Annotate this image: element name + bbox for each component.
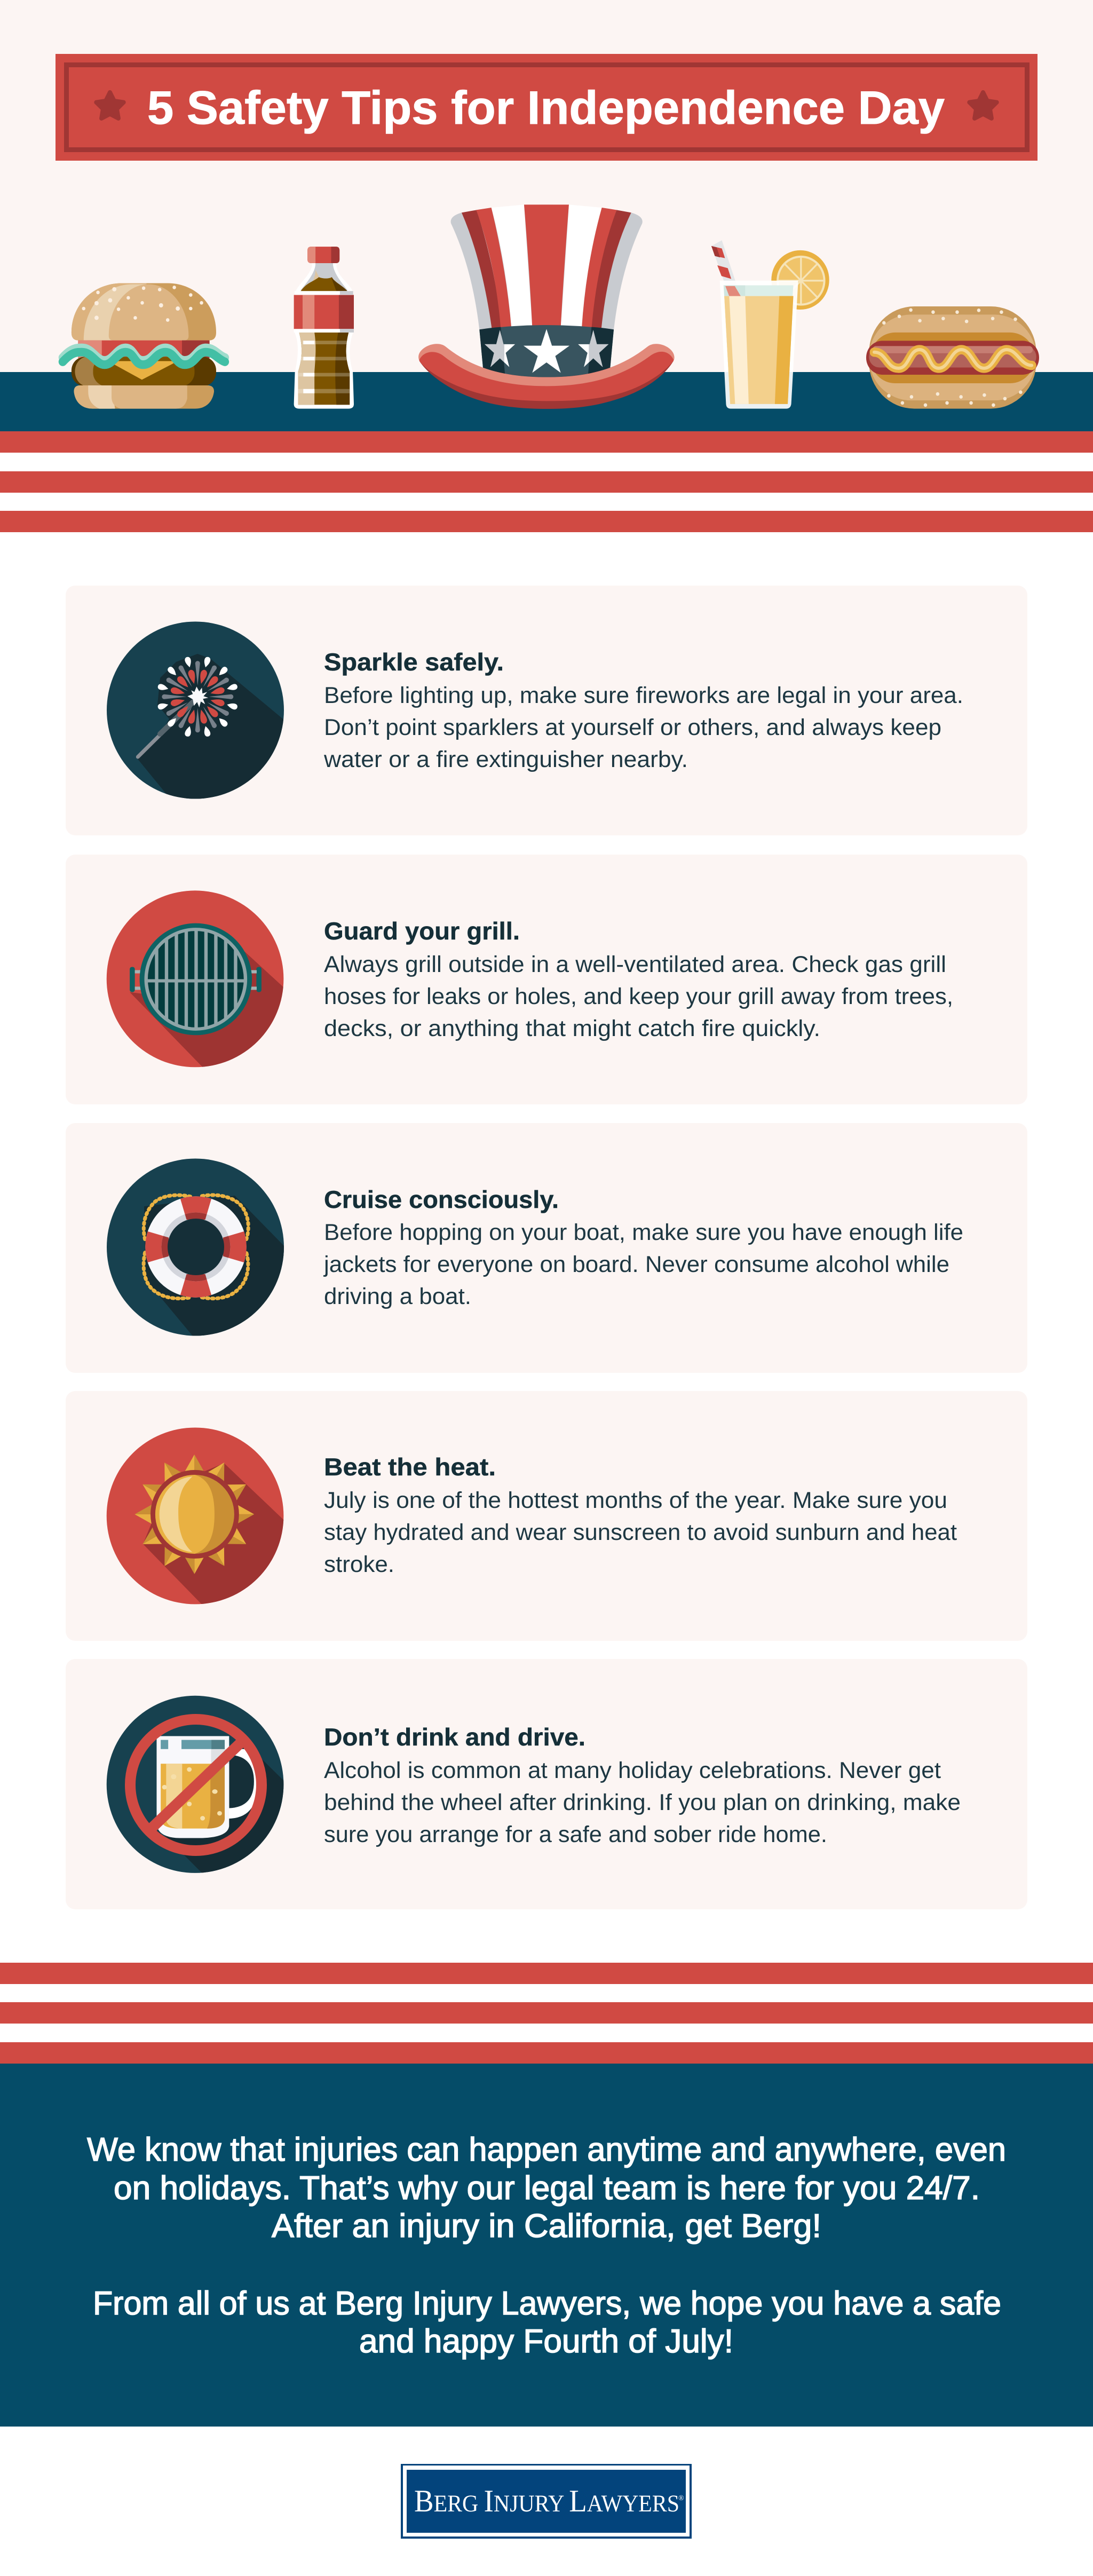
title banner (56, 54, 1037, 161)
body text: decks, or anything that might catch fire quickly. (324, 1016, 820, 1041)
body text: water or a fire extinguisher nearby. (323, 747, 688, 772)
icon: left star (96, 92, 124, 118)
star: left (485, 330, 515, 367)
body text: Before lighting up, make sure fireworks are legal in your area. (324, 683, 963, 708)
lemon slice (771, 250, 829, 310)
panel: Don't drink and drive (66, 1659, 1027, 1909)
illustration: burger (63, 283, 225, 409)
closing message: We know that injuries can happen anytime and anywhere, even (87, 2131, 1006, 2168)
illustration: Uncle Sam hat (418, 204, 675, 409)
body text: sure you arrange for a safe and sober ride home. (324, 1822, 827, 1847)
closing message: After an injury in California, get Berg! (272, 2208, 821, 2245)
title: 5 Safety Tips for Independence Day (147, 81, 945, 134)
body text (324, 952, 953, 1041)
body text (324, 1488, 957, 1577)
top background (0, 0, 1093, 372)
body text (323, 1220, 963, 1309)
top stripes (0, 431, 1093, 532)
body text: driving a boat. (324, 1284, 471, 1309)
closing message: From all of us at Berg Injury Lawyers, we hope you have a safe (93, 2285, 1001, 2322)
closing message (87, 2131, 1006, 2360)
heading: Beat the heat. (324, 1453, 496, 1481)
closing message: and happy Fourth of July! (359, 2323, 733, 2360)
body text: stay hydrated and wear sunscreen to avoid sunburn and heat (324, 1520, 957, 1545)
body text: Before hopping on your boat, make sure you have enough life (324, 1220, 963, 1245)
body text: Always grill outside in a well-ventilated area. Check gas grill (324, 952, 946, 977)
panel: Cruise consciously (66, 1123, 1027, 1373)
icon: sun (107, 1427, 289, 1610)
icon: no beer (107, 1696, 289, 1876)
icon: sparkler (107, 621, 288, 806)
icon: life ring (107, 1158, 288, 1345)
heading: Guard your grill. (324, 917, 520, 945)
illustration: cola bottle (294, 247, 354, 409)
illustration: lemonade glass (711, 240, 829, 409)
navy table band (0, 372, 1093, 431)
panel: Sparkle safely (66, 586, 1027, 835)
icon: grill (107, 890, 302, 1068)
body text: hoses for leaks or holes, and keep your grill away from trees, (324, 984, 953, 1009)
panel: Beat the heat (66, 1391, 1027, 1641)
icon: right star (969, 92, 997, 118)
body text (323, 683, 963, 772)
heading: Sparkle safely. (324, 648, 504, 676)
body text: July is one of the hottest months of the year. Make sure you (324, 1488, 947, 1513)
body text: behind the wheel after drinking. If you plan on drinking, make (324, 1790, 961, 1815)
body text: Don’t point sparklers at yourself or others, and always keep (324, 715, 941, 740)
heading: Cruise consciously. (324, 1186, 559, 1213)
star: right (578, 330, 608, 367)
footer panel (0, 2064, 1093, 2427)
body text: stroke. (324, 1552, 394, 1577)
heading: Don’t drink and drive. (324, 1723, 585, 1751)
logo: Berg Injury Lawyers (401, 2464, 692, 2539)
body text: Alcohol is common at many holiday celebrations. Never get (324, 1758, 941, 1783)
bottom stripes (0, 1963, 1093, 2064)
star: centre (524, 329, 569, 373)
illustration: hot dog (866, 306, 1039, 409)
closing message: on holidays. That’s why our legal team is here for you 24/7. (114, 2170, 980, 2207)
logo: Berg Injury Lawyers: ® (678, 2494, 684, 2502)
straw (711, 240, 741, 297)
body text: jackets for everyone on board. Never consume alcohol while (323, 1252, 949, 1277)
panel: Guard your grill (66, 855, 1027, 1104)
logo: Berg Injury Lawyers: BERG INJURY LAWYERS (414, 2483, 679, 2518)
body text (324, 1758, 961, 1847)
